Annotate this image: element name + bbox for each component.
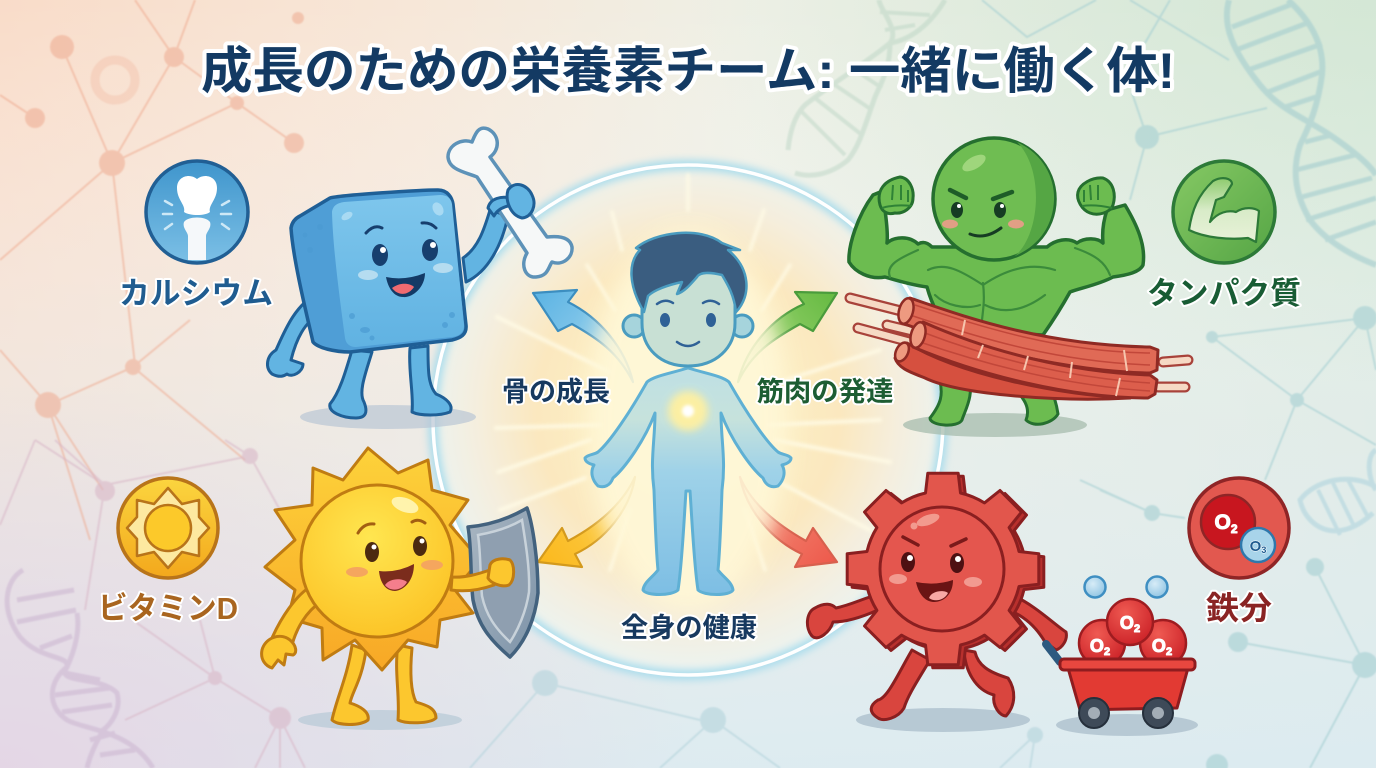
- sun rays: [265, 448, 480, 670]
- oxygen balls: 2: [1134, 623, 1140, 635]
- cube body: [291, 190, 466, 352]
- label: muscle development: 筋肉の発達: [756, 377, 894, 407]
- right arm: [1008, 595, 1066, 650]
- background: DNA helix top right: [1227, 0, 1376, 265]
- cart handle: [1046, 644, 1060, 662]
- child hair: [631, 233, 746, 312]
- wagon: [1060, 659, 1195, 728]
- gear inner disc: [880, 507, 1004, 631]
- muscle fibre bundles: [895, 298, 1158, 399]
- oxygen balls: [1079, 599, 1186, 666]
- cube speckles: [302, 224, 455, 340]
- shadow: [903, 413, 1087, 437]
- background: molecular network top left: [0, 0, 304, 540]
- cube highlight: [340, 200, 446, 222]
- oxygen balls: O: [1152, 636, 1166, 656]
- legs: [332, 645, 436, 724]
- oxygen balls: 2: [1166, 646, 1172, 658]
- child head: [642, 250, 735, 366]
- character: calcium cube: [267, 128, 572, 429]
- left fist: [879, 177, 913, 214]
- gear 3D edge: [852, 476, 1044, 668]
- label: iron: 鉄分: [1206, 590, 1272, 626]
- head: [933, 138, 1055, 260]
- label: vitamin D: ビタミンD: [98, 591, 238, 626]
- legs: [930, 375, 1058, 425]
- label: bone growth: 骨の成長: [502, 377, 610, 407]
- child chest glow: [668, 391, 708, 431]
- right arm: [463, 210, 508, 282]
- arrow: whole-body health (yellow): [538, 477, 635, 567]
- character: red gear: [807, 473, 1198, 736]
- gear highlight: [910, 511, 941, 530]
- bone: [448, 128, 572, 277]
- arrow: bone growth (blue): [533, 290, 633, 382]
- character: sun: [262, 448, 538, 730]
- face: [358, 223, 453, 297]
- central glow circle: [433, 165, 943, 675]
- title: 成長のための栄養素チーム: 一緒に働く体!: [201, 43, 1175, 99]
- legs: [871, 650, 1014, 720]
- radiating light rays: [496, 175, 890, 570]
- right fist: [1078, 178, 1114, 214]
- sun face disc: [301, 485, 453, 637]
- left arm and fist: [807, 597, 878, 638]
- head highlight: [960, 151, 988, 175]
- oxygen balls: O: [1120, 613, 1134, 633]
- torso and arms: [849, 190, 1144, 335]
- chest muscle lines: [889, 248, 1110, 320]
- cube front: [332, 195, 464, 347]
- icon: iron oxygen: O: [1214, 511, 1231, 534]
- left arm: [272, 585, 322, 645]
- face: [942, 190, 1024, 236]
- icon: iron oxygen: O: [1250, 538, 1261, 555]
- shadow: [300, 405, 476, 429]
- icon: protein muscle: [1173, 161, 1275, 263]
- background: molecular network right: [982, 0, 1376, 768]
- background: molecular network bottom center: [470, 670, 1043, 768]
- oxygen balls: O: [1090, 636, 1104, 656]
- arrow: iron (red): [740, 477, 837, 567]
- background: DNA helix bottom left: [7, 570, 153, 768]
- hand: [488, 185, 534, 218]
- icon: iron oxygen: 2: [1231, 522, 1238, 536]
- muscle fibre end caps: [892, 297, 928, 364]
- cart shadow: [1056, 714, 1198, 736]
- background: molecular network bottom left: [0, 440, 305, 768]
- left arm: [267, 293, 322, 376]
- label: whole-body health: 全身の健康: [621, 613, 757, 643]
- label: protein: タンパク質: [1147, 276, 1301, 311]
- child ears: [623, 315, 645, 337]
- muscle fibre tendons: [850, 298, 1188, 387]
- left hand: [262, 636, 296, 668]
- muscle fibre stripes: [910, 305, 1150, 391]
- gear body: [847, 473, 1039, 665]
- face: [889, 537, 982, 602]
- background: DNA helix top center: [788, 0, 945, 175]
- child face: [657, 301, 719, 346]
- right arm and fist: [451, 559, 514, 591]
- label: calcium: カルシウム: [119, 276, 273, 311]
- background: DNA helix right: [1300, 450, 1376, 535]
- oxygen balls: 2: [1104, 646, 1110, 658]
- icon: calcium bone: [146, 161, 248, 263]
- icon: iron oxygen: [1189, 478, 1289, 578]
- legs: [330, 346, 451, 418]
- muscle fibre segment marks: [962, 320, 1127, 396]
- oxygen bubbles: [1084, 576, 1168, 598]
- child body: [585, 368, 791, 594]
- shield inner: [478, 520, 529, 642]
- child glow: [588, 230, 788, 610]
- icon: iron oxygen: 3: [1261, 545, 1266, 555]
- arrow: muscle development (green): [738, 292, 837, 382]
- shadow: [298, 710, 462, 730]
- sun highlight: [389, 494, 421, 516]
- shadow: [856, 708, 1030, 732]
- child figure: [585, 230, 791, 610]
- character: protein muscleman: [849, 138, 1188, 437]
- face: [346, 520, 443, 591]
- shield: [468, 508, 538, 657]
- head shading: [1015, 142, 1054, 256]
- icon: vitamin D sun: [118, 478, 218, 578]
